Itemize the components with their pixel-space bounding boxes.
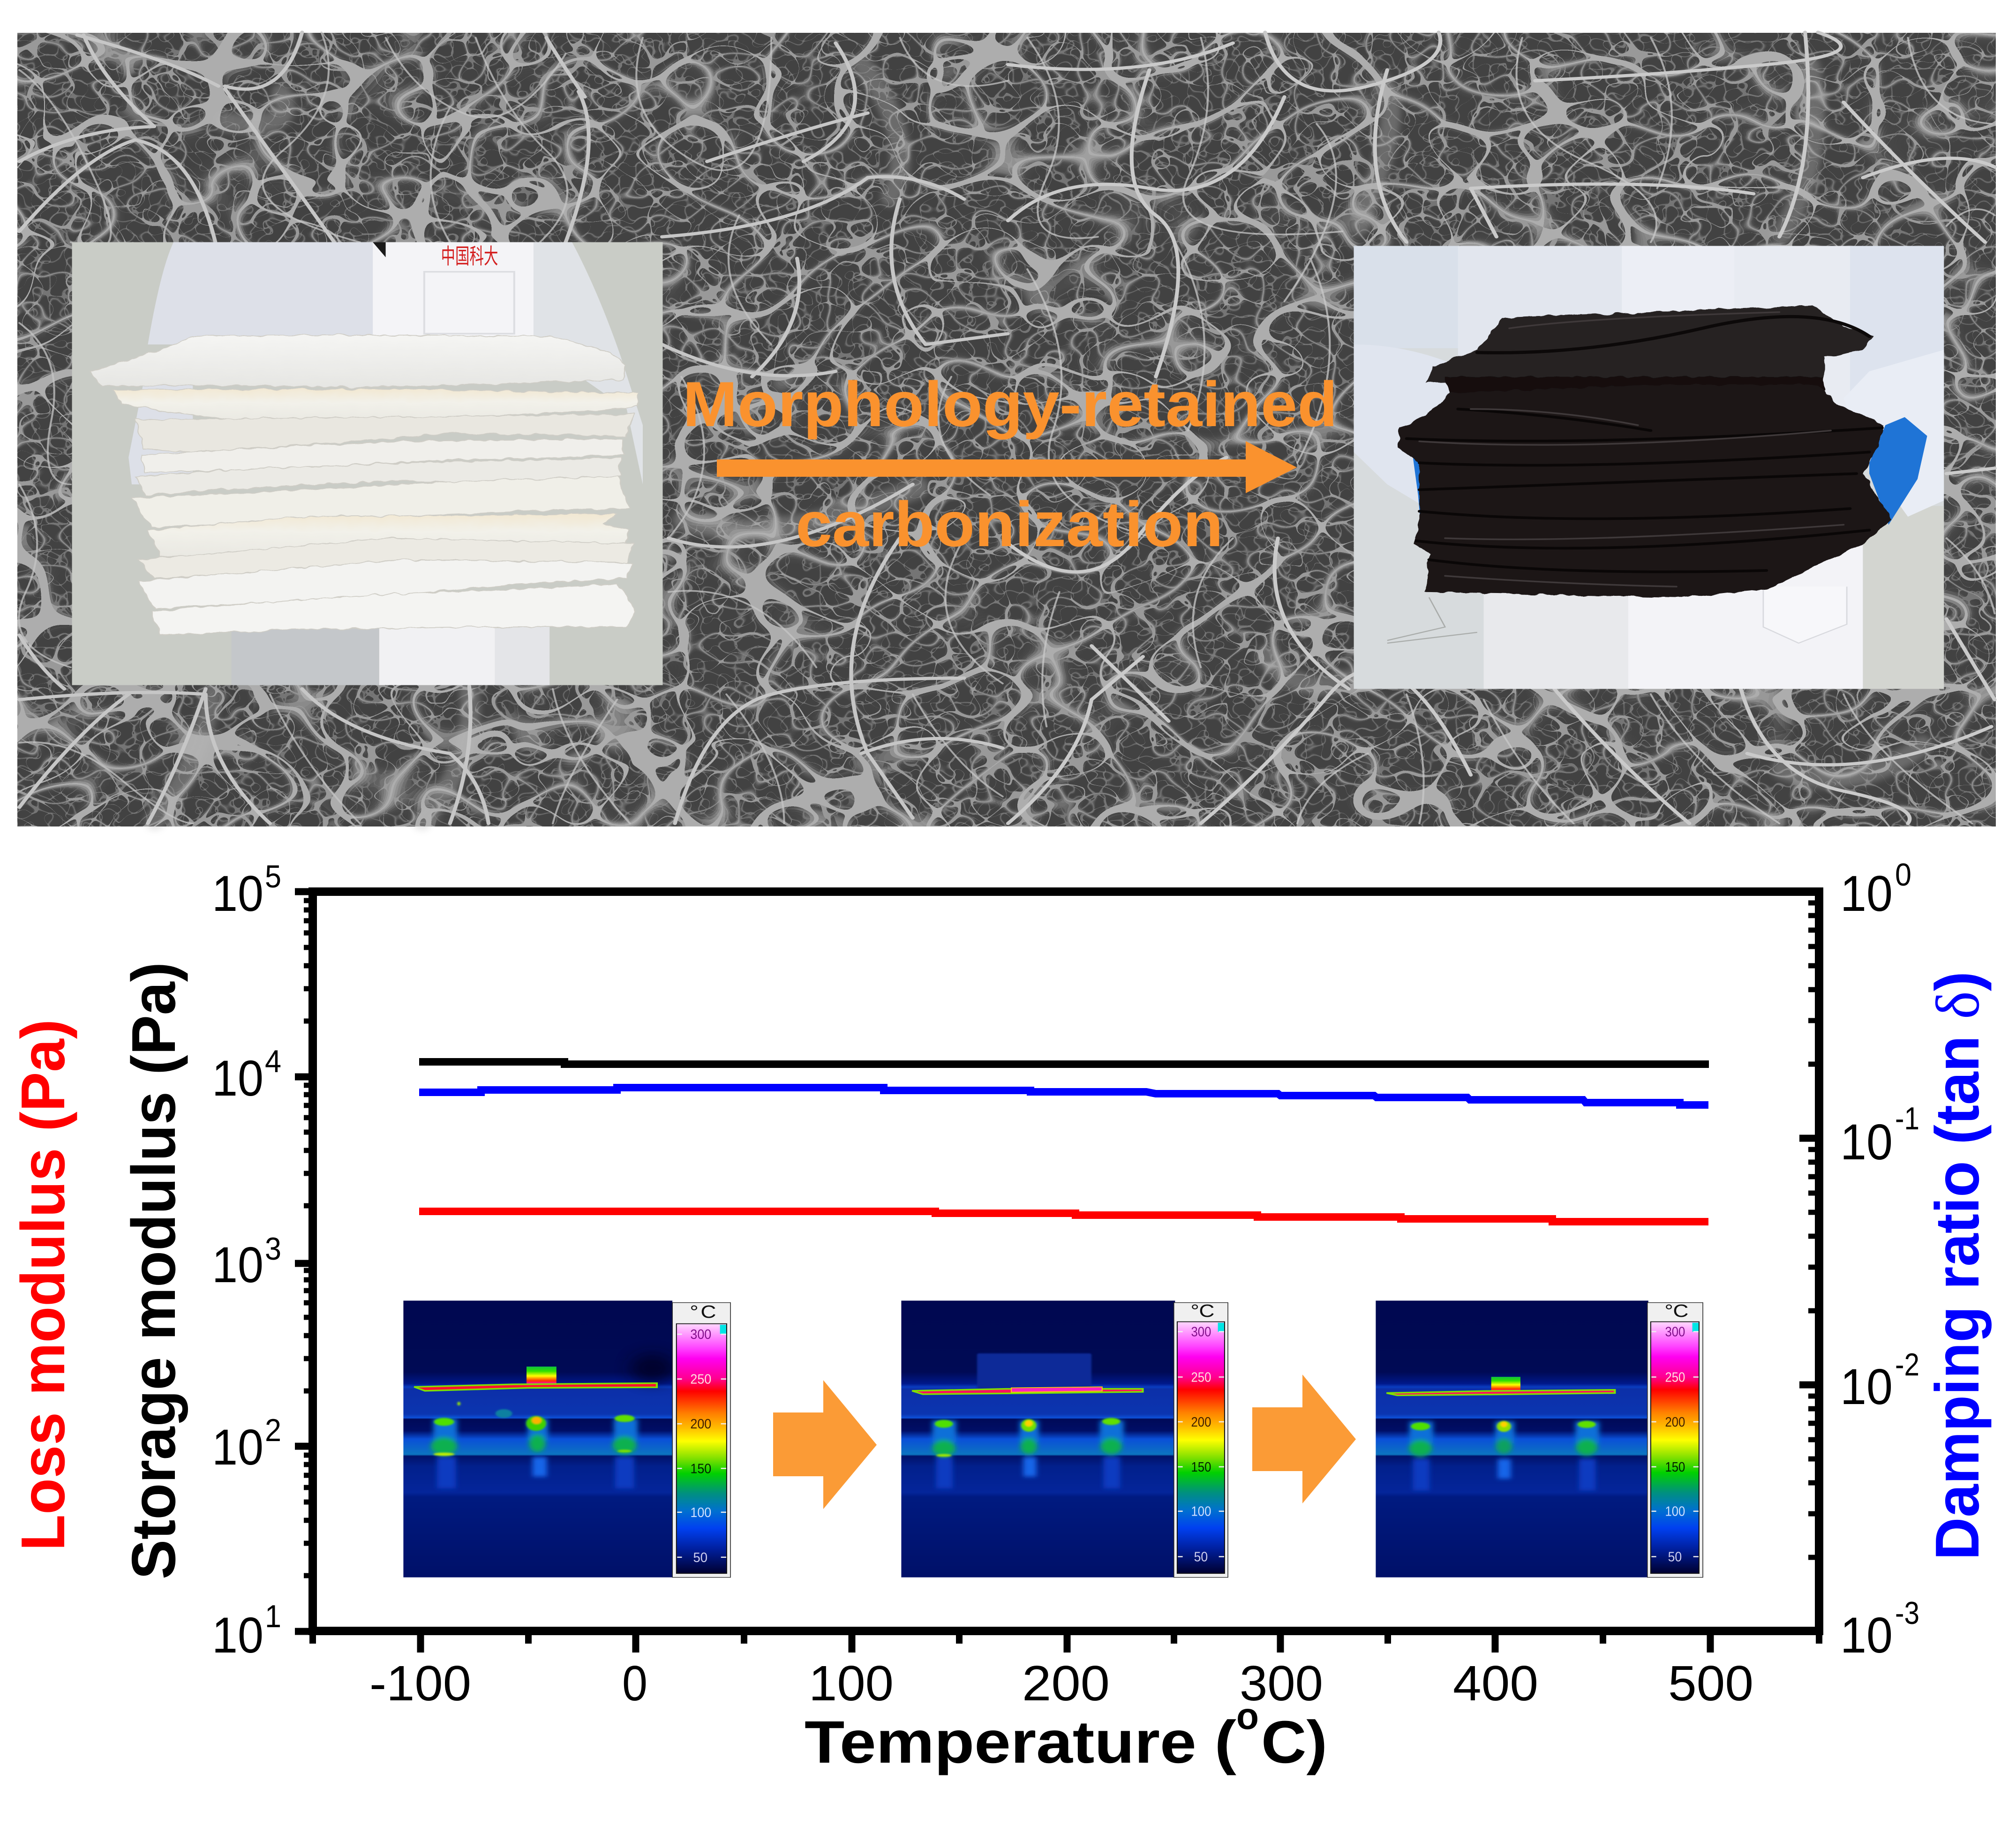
heading: carbonization: carbonization: [796, 488, 1223, 560]
x-axis title: C): [1261, 1709, 1327, 1776]
colour scale, start image: ° C: [690, 1302, 716, 1322]
x-axis title: Temperature (: [805, 1709, 1236, 1776]
y-axis title: loss modulus: Loss modulus (Pa): [8, 1019, 77, 1551]
colour scale, start image: [672, 1302, 730, 1578]
colour scale, start image: 200: [690, 1416, 711, 1432]
colour scale, middle image: 250: [1191, 1369, 1211, 1385]
arrow: thermal sequence 2: [1252, 1375, 1356, 1503]
left y-axis tick labels: 3: [265, 1231, 281, 1267]
curve: damping ratio: [419, 1088, 1708, 1105]
x-axis tick labels: 400: [1453, 1656, 1538, 1711]
x-axis tick labels: 100: [809, 1656, 894, 1711]
heading: Morphology-retained: Morphology-retained: [683, 368, 1338, 440]
panel: SEM fibre network background: [17, 32, 1996, 826]
colour scale, middle image: 50: [1194, 1549, 1208, 1564]
right y-axis tick labels: 10: [1840, 1113, 1893, 1170]
colour scale, end image: 150: [1665, 1459, 1685, 1474]
right y-axis tick labels: -1: [1895, 1101, 1919, 1136]
right y-axis tick labels: 0: [1895, 857, 1911, 893]
x-axis title: o: [1236, 1695, 1259, 1737]
curve: loss modulus: [419, 1211, 1708, 1222]
left y-axis tick labels: 10: [212, 1236, 263, 1293]
colour scale, start image: 300: [690, 1327, 711, 1342]
colour scale, start image: 50: [693, 1550, 707, 1565]
chart: modulus vs temperature: [8, 857, 1992, 1776]
left y-axis tick labels: [212, 859, 281, 1663]
right y-axis tick labels: 10: [1840, 1358, 1893, 1415]
x-axis tick labels: 0: [622, 1656, 647, 1711]
left y-axis tick labels: 1: [265, 1599, 281, 1634]
colour scale, end image: 200: [1665, 1414, 1685, 1429]
colour scale, middle image: 100: [1191, 1504, 1211, 1519]
left y-axis tick labels: 10: [212, 1050, 263, 1106]
left y-axis tick labels: 5: [265, 859, 281, 894]
colour scale, start image: 250: [690, 1372, 711, 1387]
inset: thermal image, middle: [901, 1300, 1228, 1578]
right y-axis tick labels: 10: [1840, 1607, 1893, 1663]
left y-axis tick labels: 10: [212, 1607, 263, 1663]
colour scale, end image: 250: [1665, 1369, 1685, 1385]
photo: carbonized black slab stack: [1354, 246, 1944, 689]
left y-axis tick labels: 4: [265, 1044, 281, 1079]
photo: white precursor slab stack: 中国科大: [441, 244, 498, 269]
colour scale, middle image: 150: [1191, 1459, 1211, 1474]
y-axis title: storage modulus: Storage modulus (Pa): [119, 962, 188, 1579]
left y-axis tick labels: 2: [265, 1412, 281, 1448]
colour scale, middle image: 200: [1191, 1414, 1211, 1429]
arrow: carbonization direction: [717, 441, 1297, 493]
plot frame and ticks: [295, 892, 1819, 1653]
colour scale, middle image: 300: [1191, 1324, 1211, 1339]
colour scale, end image: 100: [1665, 1504, 1685, 1519]
colour scale, end image: [1647, 1301, 1703, 1578]
y-axis title: damping ratio: Damping ratio (tan δ): [1923, 971, 1992, 1560]
colour scale, middle image: [1174, 1301, 1228, 1578]
colour scale, end image: 300: [1665, 1324, 1685, 1339]
inset: thermal image, end: [1376, 1300, 1703, 1578]
curve: storage modulus: [419, 1062, 1709, 1064]
inset: thermal image, start: [403, 1300, 730, 1578]
colour scale, start image: 150: [690, 1461, 711, 1476]
colour scale, middle image: ° C: [1190, 1301, 1214, 1321]
colour scale, start image: 100: [690, 1505, 711, 1520]
arrow: thermal sequence 1: [773, 1380, 877, 1509]
right y-axis tick labels: -3: [1895, 1595, 1919, 1631]
colour scale, end image: ° C: [1664, 1301, 1688, 1321]
x-axis tick labels: 300: [1240, 1656, 1323, 1711]
x-axis tick labels: 200: [1022, 1656, 1110, 1711]
x-axis tick labels: [369, 1656, 1753, 1711]
left y-axis tick labels: 10: [212, 865, 263, 922]
right y-axis tick labels: -2: [1895, 1347, 1919, 1382]
right y-axis tick labels: [1840, 857, 1919, 1663]
photo: white precursor slab stack: [72, 242, 663, 685]
right y-axis tick labels: 10: [1840, 865, 1893, 922]
left y-axis tick labels: 10: [212, 1419, 263, 1475]
x-axis title: [805, 1695, 1327, 1776]
x-axis tick labels: 500: [1668, 1656, 1753, 1711]
colour scale, end image: 50: [1668, 1549, 1682, 1564]
x-axis tick labels: -100: [369, 1656, 471, 1711]
